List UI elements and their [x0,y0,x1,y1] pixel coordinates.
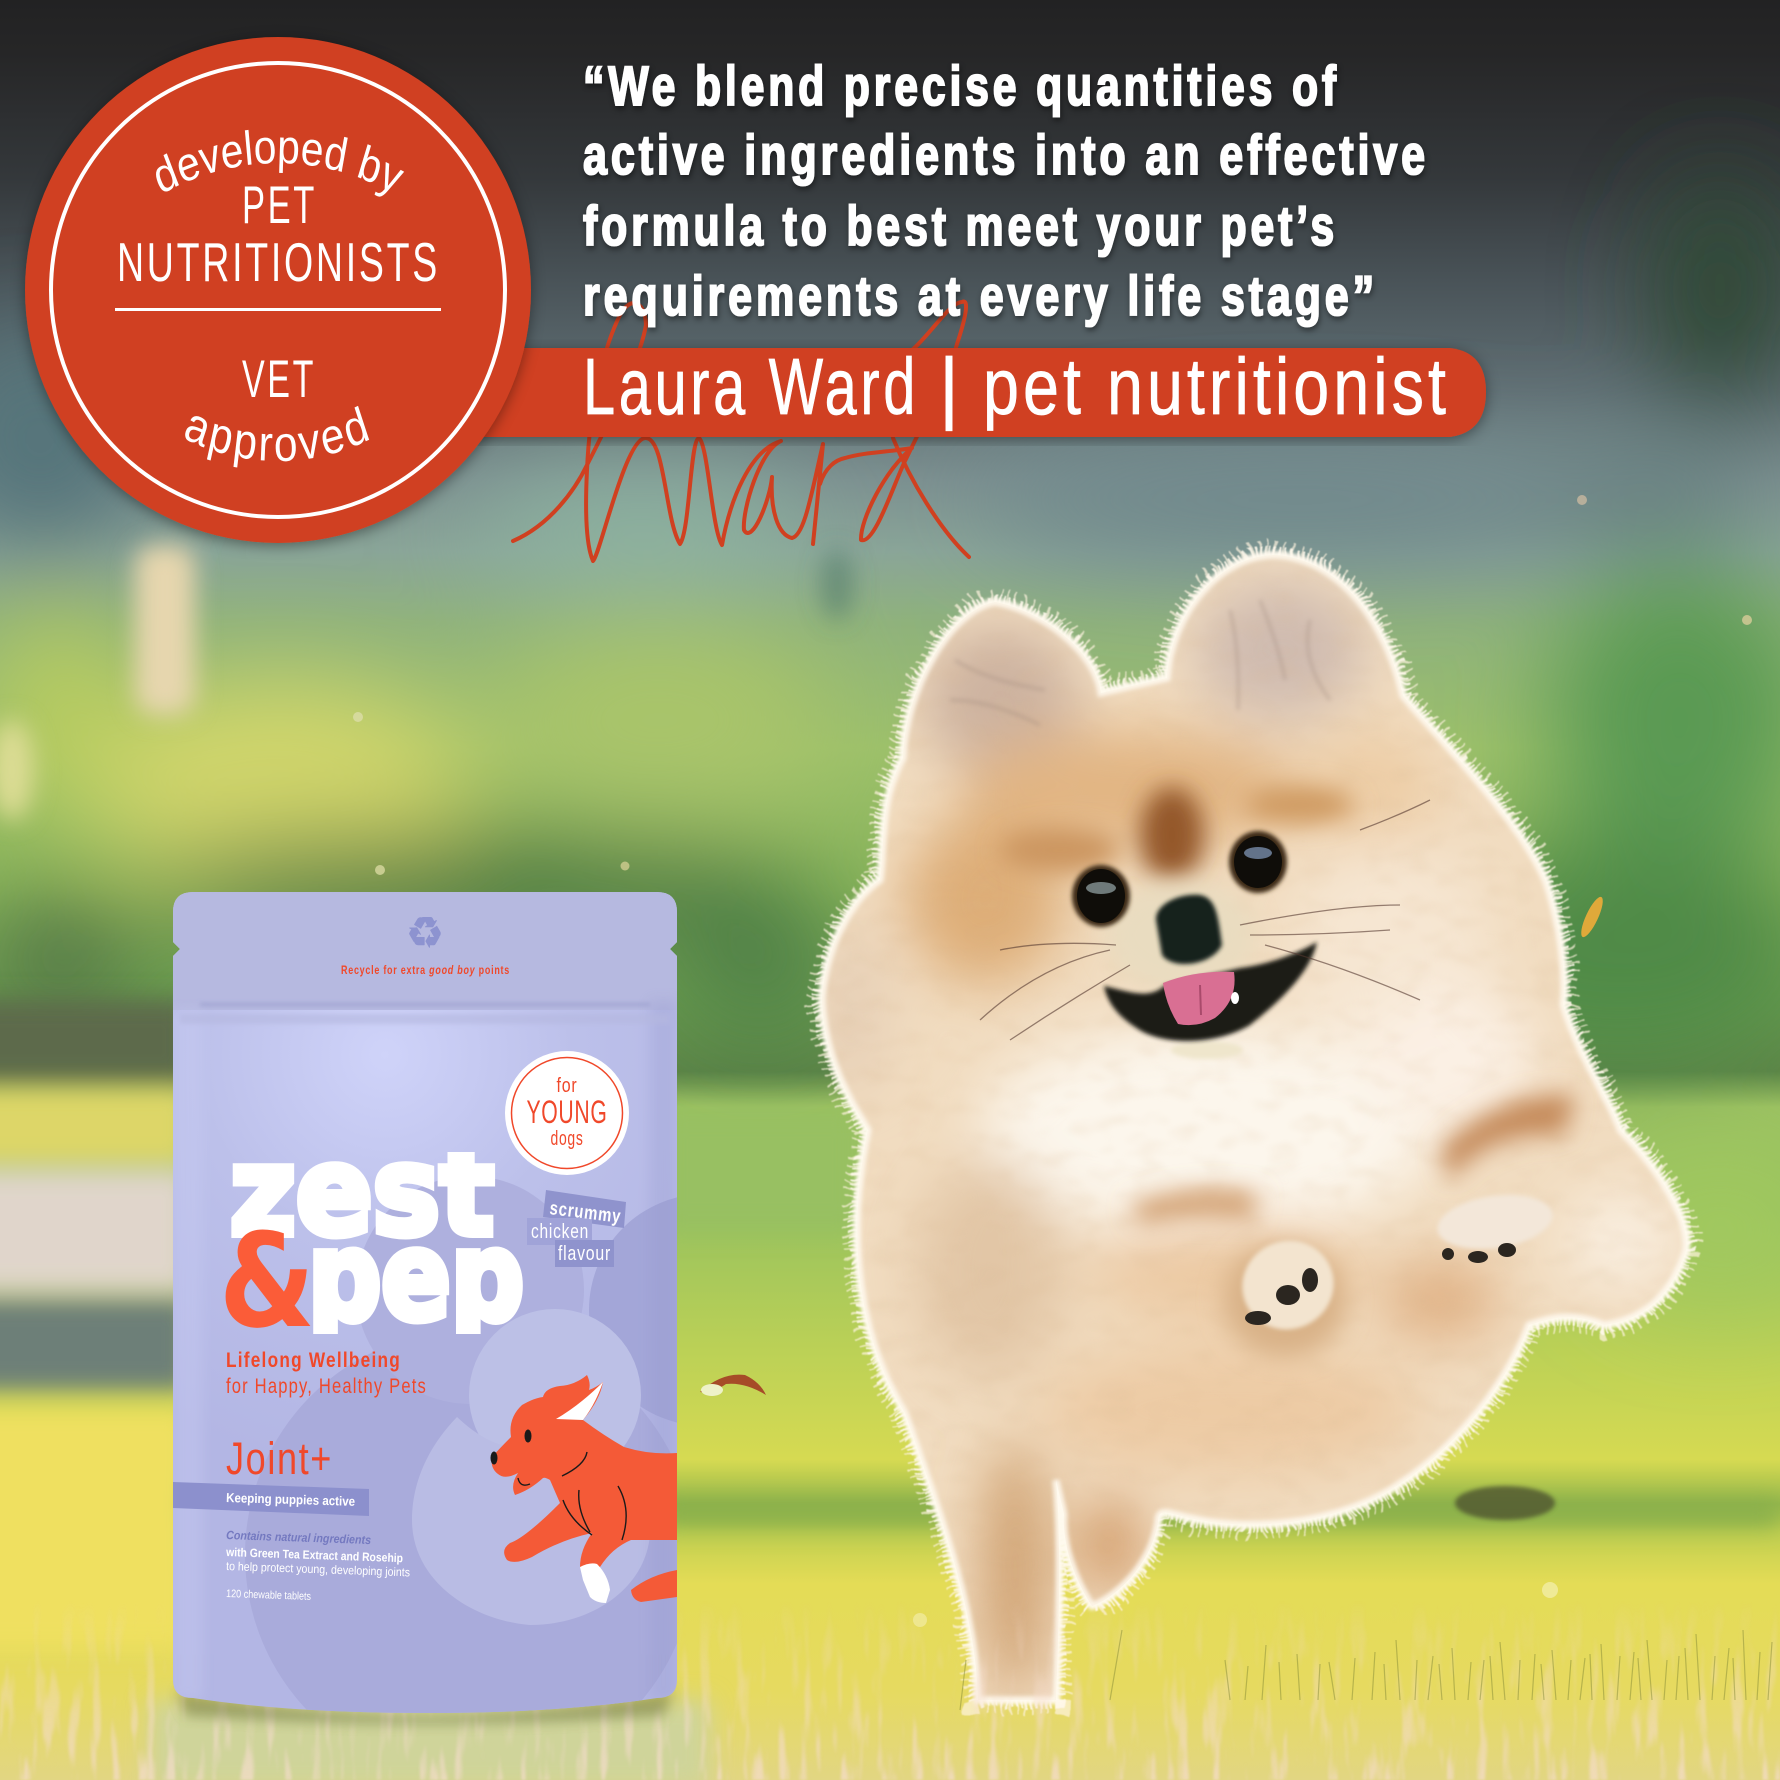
dog front paws [1223,1188,1556,1358]
name banner: Laura Ward [583,342,919,431]
brand logo [226,1152,523,1334]
product details: with Green Tea Extract and Rosehip [225,1545,403,1565]
flavour tags: chicken [531,1221,589,1243]
pull quote: requirements at every life stage” [583,264,1378,327]
badge heading [117,176,440,409]
product details: 120 chewable tablets [226,1588,312,1603]
round badge [20,37,536,554]
recycle icon: ♻ [406,908,444,957]
flavour tags: flavour [558,1243,611,1265]
life stage seal: for [556,1075,578,1097]
brand logo: pep [308,1206,524,1348]
life stage seal: dogs [550,1128,584,1150]
pouch zip seal [180,1003,670,1024]
tagline: for Happy, Healthy Pets [226,1375,427,1398]
flavour tags [527,1190,626,1267]
flavour tags: scrummy [548,1198,622,1228]
brand logo: & [219,1205,315,1357]
dog face: eyes, nose, mouth [980,800,1430,1059]
pull quote: active ingredients into an effective [583,123,1429,186]
benefit band: Keeping puppies active [226,1490,355,1509]
badge heading: PET [242,176,317,235]
illustrated dog on pouch [490,1375,677,1603]
name banner: | [939,342,959,431]
dog ear hair [950,600,1330,725]
pull quote [583,54,1429,327]
background foreground details [353,495,1752,1627]
product pouch [173,892,677,1730]
life stage seal: YOUNG [526,1094,608,1130]
product details: Contains natural ingredients [226,1528,372,1547]
product details: to help protect young, developing joints [226,1559,410,1579]
pouch background shapes [173,892,677,1713]
life stage seal [505,1051,629,1175]
pull quote: “We blend precise quantities of [583,54,1340,117]
dog muzzle [1105,880,1255,990]
grass streaks foreground [0,1600,1780,1780]
product details [225,1528,410,1603]
badge top text: developed by [156,130,404,197]
tagline: Lifelong Wellbeing [226,1349,401,1372]
badge bottom text: approved [185,406,370,468]
dog brown markings [1000,787,1575,1225]
name banner [400,342,1486,437]
product name: Joint+ [226,1433,333,1484]
signature [513,302,969,561]
name banner: pet nutritionist [983,342,1450,431]
benefit band [173,1482,369,1516]
recycle note: Recycle for extra good boy points [341,963,510,977]
badge heading: VET [242,350,316,409]
running pomeranian dog [780,530,1720,1730]
badge heading: NUTRITIONISTS [117,231,440,293]
pull quote: formula to best meet your pet’s [583,194,1338,257]
brand logo: zest [230,1121,494,1263]
tagline [226,1349,427,1398]
